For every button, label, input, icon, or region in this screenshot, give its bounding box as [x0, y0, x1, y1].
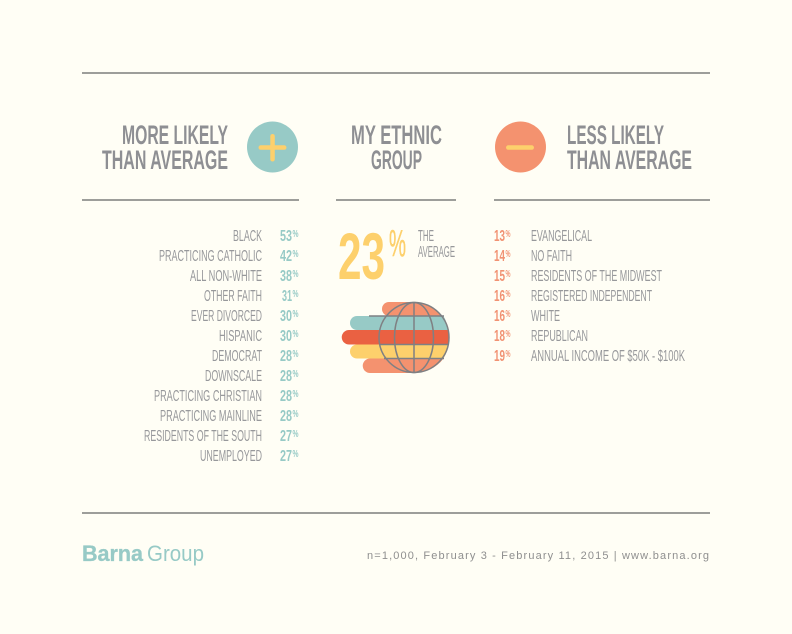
row: no faith 14%: % — [506, 249, 511, 260]
logo: Barna Group: Group — [147, 541, 204, 566]
row: downscale 28%: 28 — [280, 368, 292, 385]
stat: 23% the average — [338, 219, 455, 293]
row: democrat 28%: 28 — [280, 348, 292, 365]
row: evangelical 13%: 13 — [494, 228, 505, 245]
row: evangelical 13%: % — [506, 229, 511, 240]
row: practicing christian 28%: % — [292, 389, 299, 400]
heading: less likely than average — [567, 120, 692, 175]
heading: more likely than average: MORE LIKELY — [122, 120, 228, 150]
source note: n=1,000, February 3 - February 11, 2015 | www.barna.org — [367, 550, 709, 562]
row: residents of the midwest 15% — [494, 268, 662, 285]
row: black 53%: % — [292, 229, 299, 240]
row: annual income 19% — [494, 348, 685, 365]
row: practicing catholic 42%: % — [292, 249, 299, 260]
row: practicing christian 28%: 28 — [280, 388, 292, 405]
row: annual income 19%: 19 — [494, 348, 505, 365]
row: republican 18%: % — [506, 329, 511, 340]
row: white 16%: % — [506, 309, 511, 320]
row: residents of the midwest 15%: % — [506, 269, 511, 280]
row: unemployed 27%: UNEMPLOYED — [200, 448, 262, 465]
row: hispanic 30%: % — [292, 329, 299, 340]
row: registered independent 16%: % — [506, 289, 511, 300]
row: practicing mainline 28%: PRACTICING MAINLINE — [160, 408, 262, 425]
row: hispanic 30%: 30 — [280, 328, 292, 345]
row: hispanic 30%: HISPANIC — [219, 328, 262, 345]
row: practicing christian 28%: PRACTICING CHRISTIAN — [154, 388, 262, 405]
heading: less likely than average: LESS LIKELY — [567, 120, 664, 150]
row: unemployed 27%: % — [292, 449, 299, 460]
row: downscale 28%: % — [292, 369, 299, 380]
row: residents of the south 27%: % — [292, 429, 299, 440]
heading: my ethnic group: GROUP — [371, 145, 422, 175]
row: black 53%: 53 — [280, 228, 292, 245]
row: ever divorced 30%: EVER DIVORCED — [191, 308, 262, 325]
row: practicing mainline 28%: 28 — [280, 408, 292, 425]
icon: minus circle — [495, 122, 546, 172]
icon: globe with coloured bars — [342, 302, 449, 373]
row: white 16%: 16 — [494, 308, 505, 325]
row: white 16% — [494, 308, 560, 325]
list: less likely groups — [494, 228, 685, 365]
row: all non-white 38%: 38 — [280, 268, 292, 285]
text: AVERAGE — [418, 244, 455, 261]
row: white 16%: WHITE — [531, 308, 560, 325]
row: annual income 19%: ANNUAL INCOME OF $50K - $100K — [531, 348, 685, 365]
row: no faith 14% — [494, 248, 572, 265]
heading: more likely than average — [102, 120, 228, 175]
row: republican 18%: REPUBLICAN — [531, 328, 588, 345]
logo: Barna Group — [82, 541, 204, 566]
row: ever divorced 30%: % — [292, 309, 299, 320]
heading: less likely than average: THAN AVERAGE — [567, 145, 692, 175]
stat: 23% the average: % — [389, 223, 406, 265]
row: registered independent 16%: 16 — [494, 288, 505, 305]
logo: Barna Group: Barna — [82, 541, 144, 566]
heading: more likely than average: THAN AVERAGE — [102, 145, 228, 175]
stat: 23% the average: 23 — [338, 219, 385, 293]
row: ever divorced 30%: 30 — [280, 308, 292, 325]
row: democrat 28%: DEMOCRAT — [212, 348, 262, 365]
stat: 23% the average: THE — [418, 228, 434, 245]
row: residents of the midwest 15%: RESIDENTS OF THE MIDWEST — [531, 268, 662, 285]
row: practicing mainline 28%: % — [292, 409, 299, 420]
row: all non-white 38%: % — [292, 269, 299, 280]
row: residents of the south 27%: 27 — [280, 428, 292, 445]
row: no faith 14%: 14 — [494, 248, 505, 265]
icon: plus circle — [247, 122, 298, 172]
row: republican 18%: 18 — [494, 328, 505, 345]
row: practicing catholic 42%: PRACTICING CATHOLIC — [159, 248, 262, 265]
row: other faith 31%: % — [292, 289, 299, 300]
row: other faith 31%: 31 — [282, 288, 292, 305]
heading: my ethnic group — [351, 120, 442, 175]
row: other faith 31%: OTHER FAITH — [204, 288, 262, 305]
row: practicing catholic 42%: 42 — [280, 248, 292, 265]
row: evangelical 13% — [494, 228, 592, 245]
row: registered independent 16%: REGISTERED INDEPENDENT — [531, 288, 652, 305]
heading: my ethnic group: MY ETHNIC — [351, 120, 442, 150]
row: residents of the midwest 15%: 15 — [494, 268, 505, 285]
row: black 53%: BLACK — [233, 228, 262, 245]
row: registered independent 16% — [494, 288, 652, 305]
row: all non-white 38%: ALL NON-WHITE — [190, 268, 262, 285]
row: residents of the south 27%: RESIDENTS OF THE SOUTH — [144, 428, 262, 445]
row: democrat 28%: % — [292, 349, 299, 360]
row: no faith 14%: NO FAITH — [531, 248, 572, 265]
list: more likely groups — [144, 228, 299, 465]
row: annual income 19%: % — [506, 349, 511, 360]
row: evangelical 13%: EVANGELICAL — [531, 228, 592, 245]
row: republican 18% — [494, 328, 588, 345]
row: unemployed 27%: 27 — [280, 448, 292, 465]
row: downscale 28%: DOWNSCALE — [205, 368, 262, 385]
